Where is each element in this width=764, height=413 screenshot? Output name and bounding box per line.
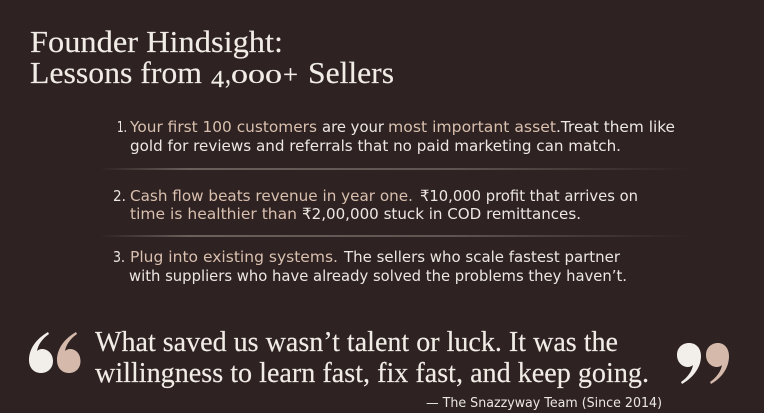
title: , bbox=[225, 55, 231, 90]
lesson 1: .Treat them like bbox=[556, 118, 675, 136]
quote text: What saved us wasn’t talent or luck. It was the bbox=[95, 327, 618, 358]
lesson 2: Cash flow beats revenue in year one. bbox=[130, 187, 413, 205]
lesson 1: Your first 100 customers bbox=[129, 118, 317, 136]
lesson 2: ₹2,00,000 stuck in COD remittances. bbox=[302, 205, 581, 223]
title bbox=[30, 24, 394, 93]
lesson 3: 3. bbox=[113, 248, 125, 266]
quote text bbox=[95, 327, 649, 389]
icon: opening quotation mark bbox=[29, 332, 80, 373]
lesson 2 bbox=[113, 187, 638, 223]
lesson 3: with suppliers who have already solved the problems they haven’t. bbox=[129, 267, 627, 285]
lesson 1: gold for reviews and referrals that no paid marketing can match. bbox=[130, 137, 621, 155]
lesson 1 bbox=[117, 118, 675, 155]
lesson 1: 1. bbox=[117, 118, 127, 136]
quote text: willingness to learn fast, fix fast, and keep going. bbox=[95, 358, 649, 389]
icon: closing quotation mark bbox=[677, 343, 729, 384]
title: Sellers bbox=[308, 55, 394, 90]
lesson 3: Plug into existing systems. bbox=[130, 248, 338, 266]
title: 4 bbox=[211, 67, 224, 93]
title: 000 bbox=[231, 66, 282, 88]
title: Founder Hindsight: bbox=[30, 24, 283, 59]
lesson 2: 2. bbox=[113, 187, 126, 205]
title: Lessons from bbox=[30, 55, 202, 90]
lesson 3: The sellers who scale fastest partner bbox=[343, 248, 621, 266]
lesson 1: are your bbox=[322, 118, 385, 136]
title: + bbox=[283, 60, 298, 89]
lesson 3 bbox=[113, 248, 627, 285]
lesson 1: most important asset bbox=[388, 118, 556, 136]
quote attribution: — The Snazzyway Team (Since 2014) bbox=[426, 395, 662, 411]
lesson 2: ₹10,000 profit that arrives on bbox=[420, 187, 638, 205]
lesson 2: time is healthier than bbox=[130, 205, 297, 223]
